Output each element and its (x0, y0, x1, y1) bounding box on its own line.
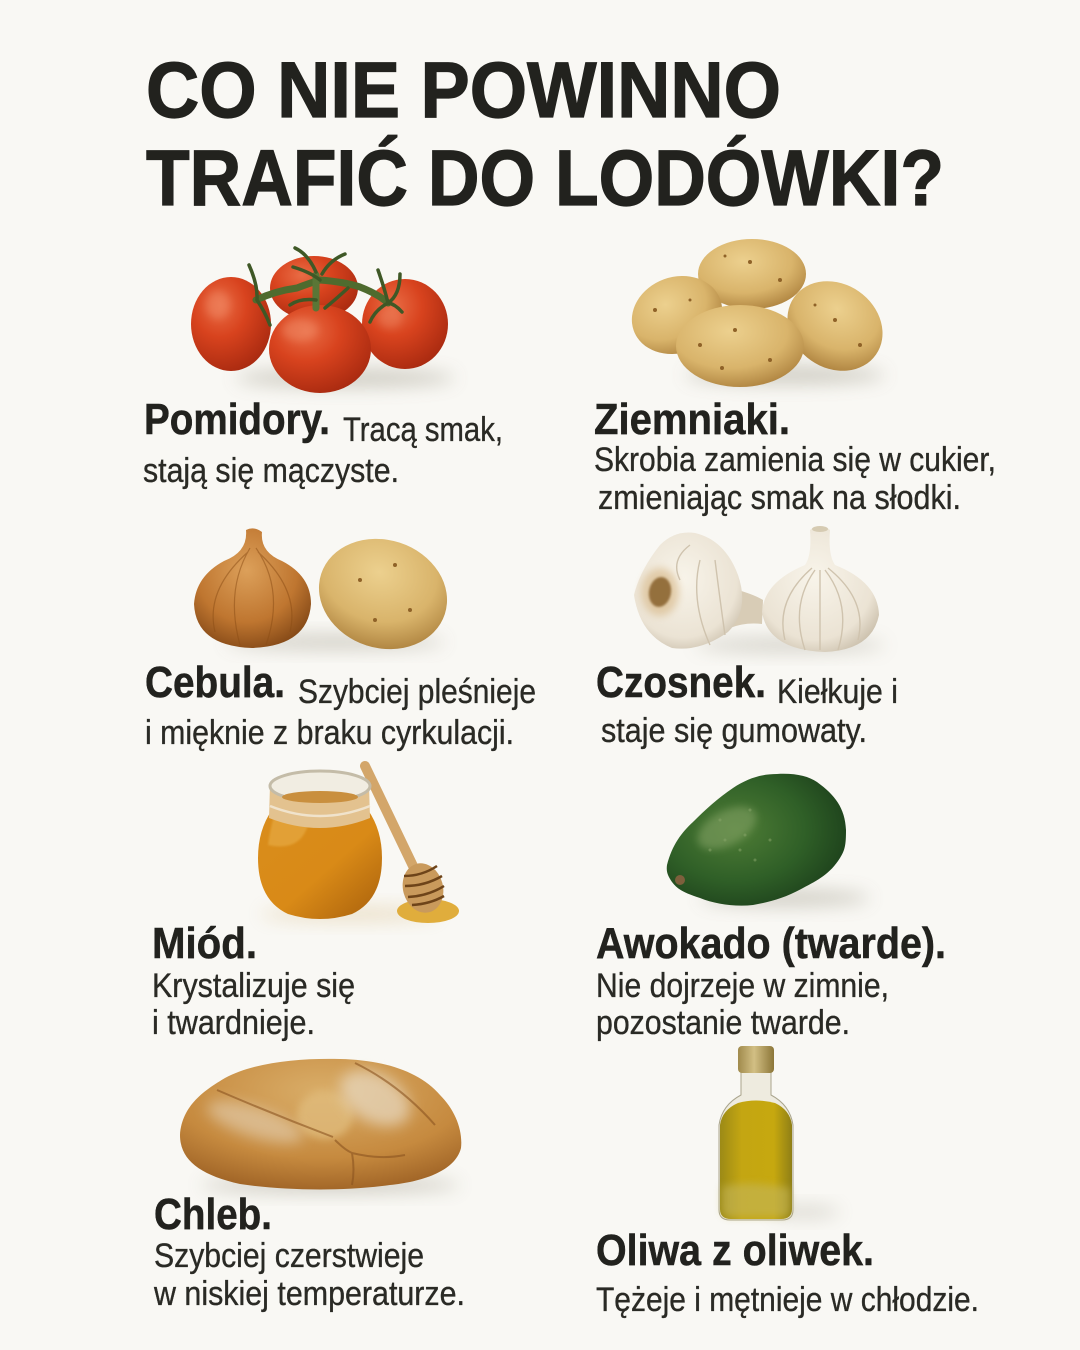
text: Miód description: i twardnieje. (152, 1004, 315, 1042)
title: CO NIE POWINNO (146, 45, 781, 134)
text: Czosnek description: Kiełkuje i (777, 673, 898, 711)
text: Miód description: Krystalizuje się (152, 967, 355, 1005)
title: TRAFIĆ DO LODÓWKI? (146, 133, 944, 222)
icon: bread loaf (180, 1058, 461, 1192)
text: Ziemniaki description: Skrobia zamienia się w cukier, (594, 441, 996, 479)
heading: Czosnek: Czosnek. (596, 658, 766, 707)
icon: tomatoes (191, 248, 455, 393)
text: Czosnek description: staje się gumowaty. (601, 712, 867, 750)
text: Awokado description: pozostanie twarde. (596, 1004, 850, 1042)
panel: miód (152, 766, 459, 1042)
heading: Miód: Miód. (152, 919, 257, 968)
icon: garlic (634, 526, 885, 652)
icon: olive oil bottle (719, 1046, 840, 1220)
text: Pomidory description: Tracą smak, (343, 411, 503, 449)
panel: czosnek (596, 526, 898, 750)
text: Awokado description (596, 967, 889, 1042)
text: Chleb description: w niskiej temperaturze. (153, 1275, 465, 1313)
text: Ziemniaki description (594, 441, 996, 517)
text: Cebula description: i mięknie z braku cyrkulacji. (145, 714, 514, 752)
heading: Chleb: Chleb. (154, 1190, 272, 1239)
panel: pomidory (143, 248, 503, 490)
heading: Pomidory: Pomidory. (144, 395, 330, 444)
panel: cebula (145, 523, 536, 752)
icon: avocado (667, 774, 870, 906)
panel: awokado (596, 774, 946, 1042)
heading: Oliwa z oliwek: Oliwa z oliwek. (596, 1226, 874, 1275)
icon: potatoes (621, 239, 900, 389)
heading: Ziemniaki: Ziemniaki. (594, 395, 790, 444)
title (146, 45, 944, 222)
panel: ziemniaki (594, 239, 996, 517)
heading: Cebula: Cebula. (145, 658, 285, 707)
text: Cebula description (145, 673, 536, 752)
panel: oliwa (596, 1046, 979, 1319)
text: Ziemniaki description: zmieniając smak na słodki. (598, 479, 961, 517)
text: Pomidory description (143, 411, 503, 490)
text: Awokado description: Nie dojrzeje w zimnie, (596, 967, 889, 1005)
text: Oliwa description: Tężeje i mętnieje w chłodzie. (596, 1281, 979, 1319)
icon: honey jar with dipper (258, 766, 459, 923)
icon: onion and potato (194, 523, 462, 665)
text: Cebula description: Szybciej pleśnieje (298, 673, 536, 711)
text: Chleb description: Szybciej czerstwieje (154, 1237, 424, 1275)
panel: chleb (153, 1058, 465, 1313)
text: Pomidory description: stają się mączyste. (143, 452, 399, 490)
text: Chleb description (153, 1237, 465, 1313)
heading: Awokado (twarde): Awokado (twarde). (596, 919, 946, 968)
text: Czosnek description (601, 673, 898, 750)
text: Miód description (152, 967, 355, 1042)
